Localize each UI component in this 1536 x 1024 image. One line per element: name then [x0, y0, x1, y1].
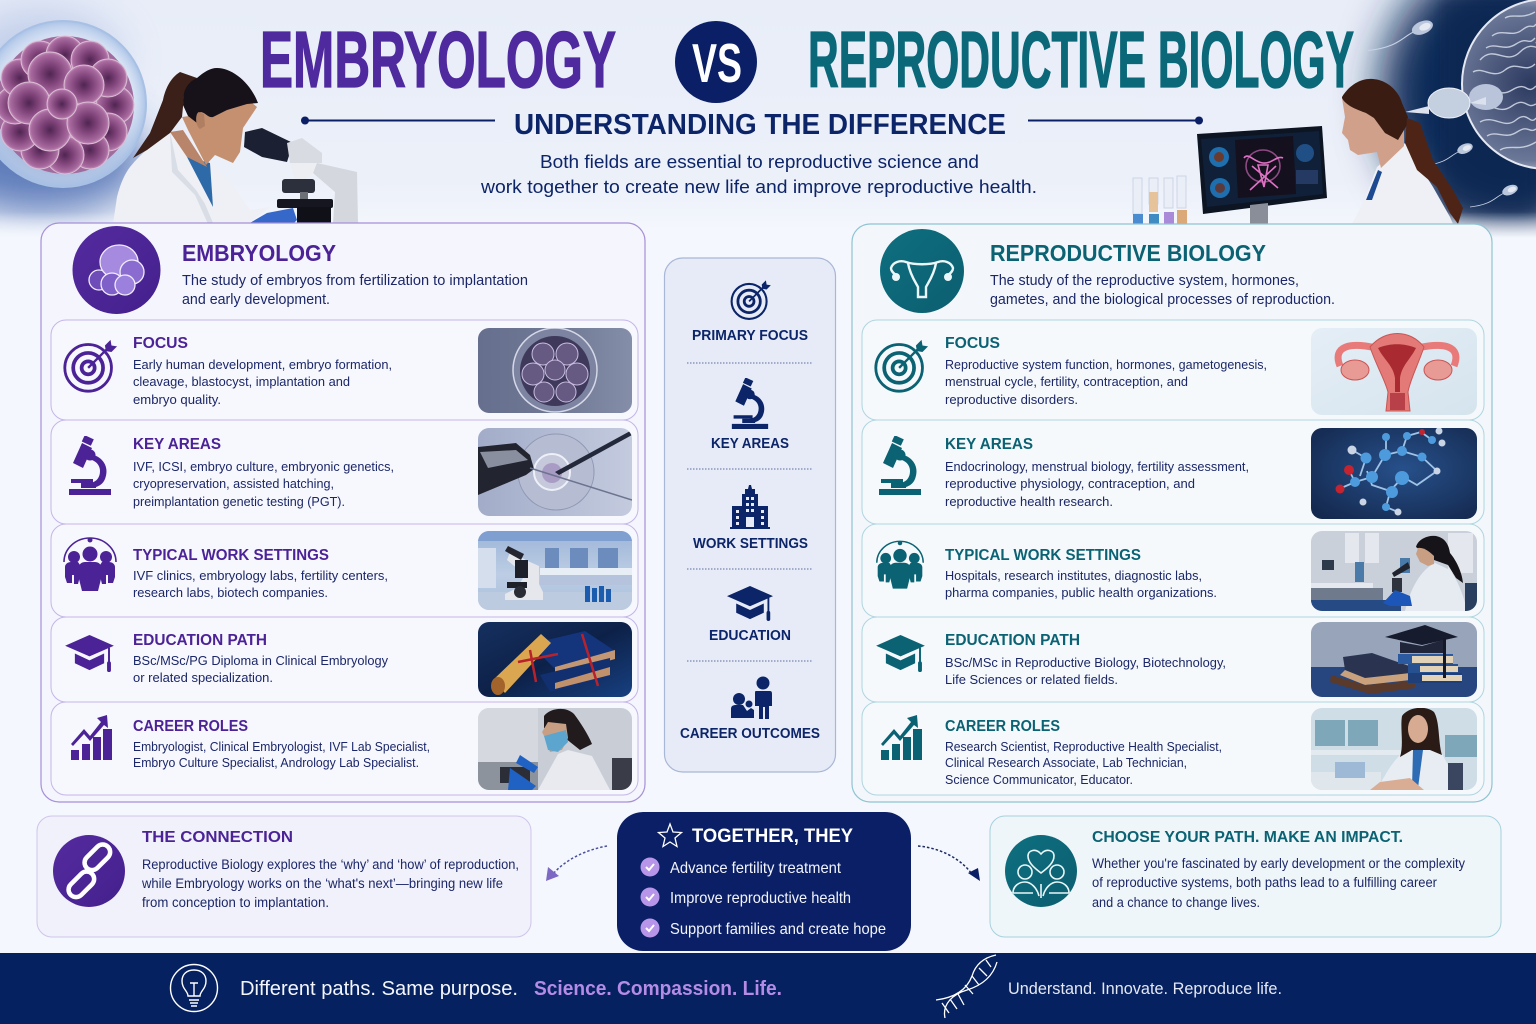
image: hormone molecule — [1311, 422, 1477, 519]
icon: target — [65, 340, 117, 391]
illustration: scientist with microscope — [113, 68, 358, 224]
subtitle: UNDERSTANDING THE DIFFERENCE — [514, 109, 1006, 141]
row: career roles — [51, 702, 638, 795]
row: typical work settings — [51, 524, 638, 617]
image: smiling scientist — [1311, 708, 1477, 790]
list: benefits: Advance fertility treatment — [670, 860, 842, 877]
illustration: scientist with monitor — [1133, 79, 1463, 224]
text: career roles: CAREER ROLES — [133, 718, 248, 735]
text: typical work settings: research labs, biotech companies. — [133, 585, 328, 600]
list: benefits: Support families and create hope — [670, 921, 886, 938]
text: career roles: Research Scientist, Reproductive Health Specialist, — [945, 739, 1222, 754]
text: education path — [945, 632, 1226, 687]
icon: graduation cap — [65, 635, 114, 672]
text: the connection: while Embryology works on the ‘what's next’—bringing new life — [141, 876, 503, 891]
text: key areas: Endocrinology, menstrual biology, fertility assessment, — [945, 459, 1249, 474]
panel: embryology — [41, 223, 645, 802]
text: focus: cleavage, blastocyst, implantation and — [133, 374, 350, 389]
title: Embryology: EMBRYOLOGY — [260, 15, 616, 104]
icon: DNA helix — [936, 955, 997, 1018]
text: choose your path: of reproductive systems, both paths lead to a fulfilling career — [1092, 875, 1437, 890]
panel: together they — [617, 812, 911, 951]
image: researcher at microscope — [1311, 531, 1477, 611]
intro text: Both fields are essential to reproductive science and — [540, 151, 979, 172]
icon: graduation cap — [876, 635, 925, 672]
badge: VS — [675, 21, 757, 103]
text: key areas: KEY AREAS — [945, 436, 1033, 453]
text: career roles: Embryologist, Clinical Embryologist, IVF Lab Specialist, — [133, 739, 430, 754]
text: education path: BSc/MSc/PG Diploma in Clinical Embryology — [133, 653, 388, 668]
text: typical work settings — [945, 547, 1217, 600]
icon: people — [877, 541, 923, 589]
text: career roles — [133, 718, 430, 770]
category: education: EDUCATION — [709, 628, 791, 644]
row: career roles — [862, 702, 1484, 795]
description: reproductive biology: The study of the reproductive system, hormones, — [990, 273, 1299, 289]
icon: people — [64, 538, 116, 591]
icon: target — [876, 340, 928, 391]
text: education path: BSc/MSc in Reproductive Biology, Biotechnology, — [945, 655, 1226, 670]
text: typical work settings: Hospitals, research institutes, diagnostic labs, — [945, 568, 1202, 583]
badge: VS: VS — [692, 32, 742, 94]
icon: chain link — [53, 835, 125, 907]
text: typical work settings: pharma companies, public health organizations. — [945, 585, 1217, 600]
description: reproductive biology: gametes, and the biological processes of reproduction. — [990, 292, 1335, 308]
category: education — [709, 586, 791, 644]
text: focus: Early human development, embryo formation, — [133, 357, 392, 372]
row: education path — [51, 617, 638, 702]
list: benefits: Improve reproductive health — [670, 890, 851, 907]
illustration: embryo in dish — [0, 21, 146, 187]
text: focus: Reproductive system function, hormones, gametogenesis, — [945, 357, 1267, 372]
description: embryology — [182, 273, 528, 308]
category: primary focus — [692, 280, 808, 344]
category: key areas — [711, 377, 789, 452]
text: focus — [945, 335, 1267, 407]
arrow: to connection — [546, 846, 607, 881]
text: key areas — [133, 436, 394, 509]
text: focus: reproductive disorders. — [945, 392, 1078, 407]
text: focus: FOCUS — [945, 335, 1000, 352]
text: career roles: Science Communicator, Educator. — [945, 772, 1133, 787]
image: books and cap — [1311, 622, 1477, 697]
text: education path: EDUCATION PATH — [945, 632, 1080, 649]
text: the connection: from conception to implantation. — [142, 895, 329, 910]
image: books and diploma — [478, 622, 632, 697]
tagline: closing: Understand. Innovate. Reproduce life. — [1008, 979, 1282, 998]
text: focus: menstrual cycle, fertility, contraception, and — [945, 374, 1188, 389]
icon: microscope — [69, 435, 111, 495]
row: focus — [51, 320, 638, 420]
panel: choose your path — [990, 816, 1501, 937]
text: focus: FOCUS — [133, 335, 188, 352]
text: education path: Life Sciences or related fields. — [945, 672, 1118, 687]
intro text — [480, 151, 1037, 197]
image: uterus diagram — [1311, 328, 1477, 415]
text: the connection: Reproductive Biology explores the ‘why’ and ‘how’ of reproduction, — [142, 857, 519, 872]
icon: star — [658, 824, 682, 846]
text: the connection — [141, 829, 519, 910]
row: key areas — [51, 420, 638, 524]
image: micromanipulation — [478, 428, 632, 516]
icon: microscope — [879, 435, 921, 495]
row: focus — [862, 320, 1484, 420]
category: career outcomes — [680, 676, 820, 742]
heading: reproductive biology: REPRODUCTIVE BIOLOGY — [990, 240, 1266, 266]
intro text: work together to create new life and improve reproductive health. — [480, 176, 1037, 197]
text: education path: or related specialization. — [133, 670, 273, 685]
category: work settings: WORK SETTINGS — [693, 536, 808, 552]
illustration: egg and sperm — [1368, 0, 1536, 207]
text: typical work settings: TYPICAL WORK SETTINGS — [945, 547, 1141, 564]
icon: growth chart — [881, 715, 922, 760]
row: typical work settings — [862, 524, 1484, 617]
text: key areas: reproductive physiology, contraception, and — [945, 476, 1195, 491]
text: key areas: IVF, ICSI, embryo culture, embryonic genetics, — [133, 459, 394, 474]
category: key areas: KEY AREAS — [711, 436, 789, 452]
icon: growth chart — [71, 715, 112, 760]
text: career roles: CAREER ROLES — [945, 718, 1060, 735]
image: embryo in dish — [478, 328, 632, 413]
icon: light bulb — [170, 964, 218, 1012]
icon: uterus badge — [880, 229, 964, 313]
description: embryology: and early development. — [182, 292, 330, 308]
heading: embryology: EMBRYOLOGY — [182, 240, 336, 266]
description: reproductive biology — [990, 273, 1335, 308]
arrow: to path — [918, 846, 980, 881]
text: choose your path: and a chance to change lives. — [1092, 895, 1260, 910]
panel: the connection — [37, 816, 531, 937]
subtitle — [301, 109, 1203, 141]
text: career roles: Clinical Research Associate, Lab Technician, — [945, 755, 1187, 770]
list: benefits — [640, 858, 886, 938]
text: choose your path: Whether you're fascinated by early development or the complexity — [1092, 856, 1465, 871]
text: focus: embryo quality. — [133, 392, 221, 407]
tagline: Different paths. Same purpose. — [240, 978, 518, 1000]
text: typical work settings: IVF clinics, embryology labs, fertility centers, — [133, 568, 388, 583]
footer band — [0, 953, 1536, 1024]
text: key areas — [945, 436, 1249, 509]
row: education path — [862, 617, 1484, 702]
image: embryologist at work — [478, 708, 632, 790]
category: work settings — [693, 485, 808, 552]
tagline: highlight: Science. Compassion. Life. — [534, 978, 782, 1000]
heading: together, they: TOGETHER, THEY — [692, 826, 853, 847]
text: typical work settings — [133, 547, 388, 600]
text: the connection: THE CONNECTION — [142, 829, 293, 846]
panel: comparison categories — [664, 258, 836, 772]
icon: people and heart — [1005, 835, 1077, 907]
row: key areas — [862, 420, 1484, 524]
header background band — [0, 0, 1536, 318]
text: key areas: reproductive health research. — [945, 494, 1113, 509]
image: laboratory — [478, 531, 632, 610]
text: career roles — [945, 718, 1222, 787]
text: key areas: preimplantation genetic testing (PGT). — [133, 494, 345, 509]
panel: reproductive biology — [852, 224, 1492, 802]
text: career roles: Embryo Culture Specialist, Andrology Lab Specialist. — [133, 755, 419, 770]
icon: embryo badge — [72, 226, 160, 314]
text: key areas: KEY AREAS — [133, 436, 221, 453]
text: typical work settings: TYPICAL WORK SETTINGS — [133, 547, 329, 564]
category: primary focus: PRIMARY FOCUS — [692, 328, 808, 344]
text: education path: EDUCATION PATH — [133, 632, 267, 649]
text: education path — [133, 632, 388, 685]
text: focus — [133, 335, 392, 407]
text: choose your path — [1092, 829, 1465, 910]
text: choose your path: CHOOSE YOUR PATH. MAKE AN IMPACT. — [1092, 829, 1403, 846]
category: career outcomes: CAREER OUTCOMES — [680, 726, 820, 742]
text: key areas: cryopreservation, assisted hatching, — [133, 476, 334, 491]
description: embryology: The study of embryos from fertilization to implantation — [182, 273, 528, 289]
